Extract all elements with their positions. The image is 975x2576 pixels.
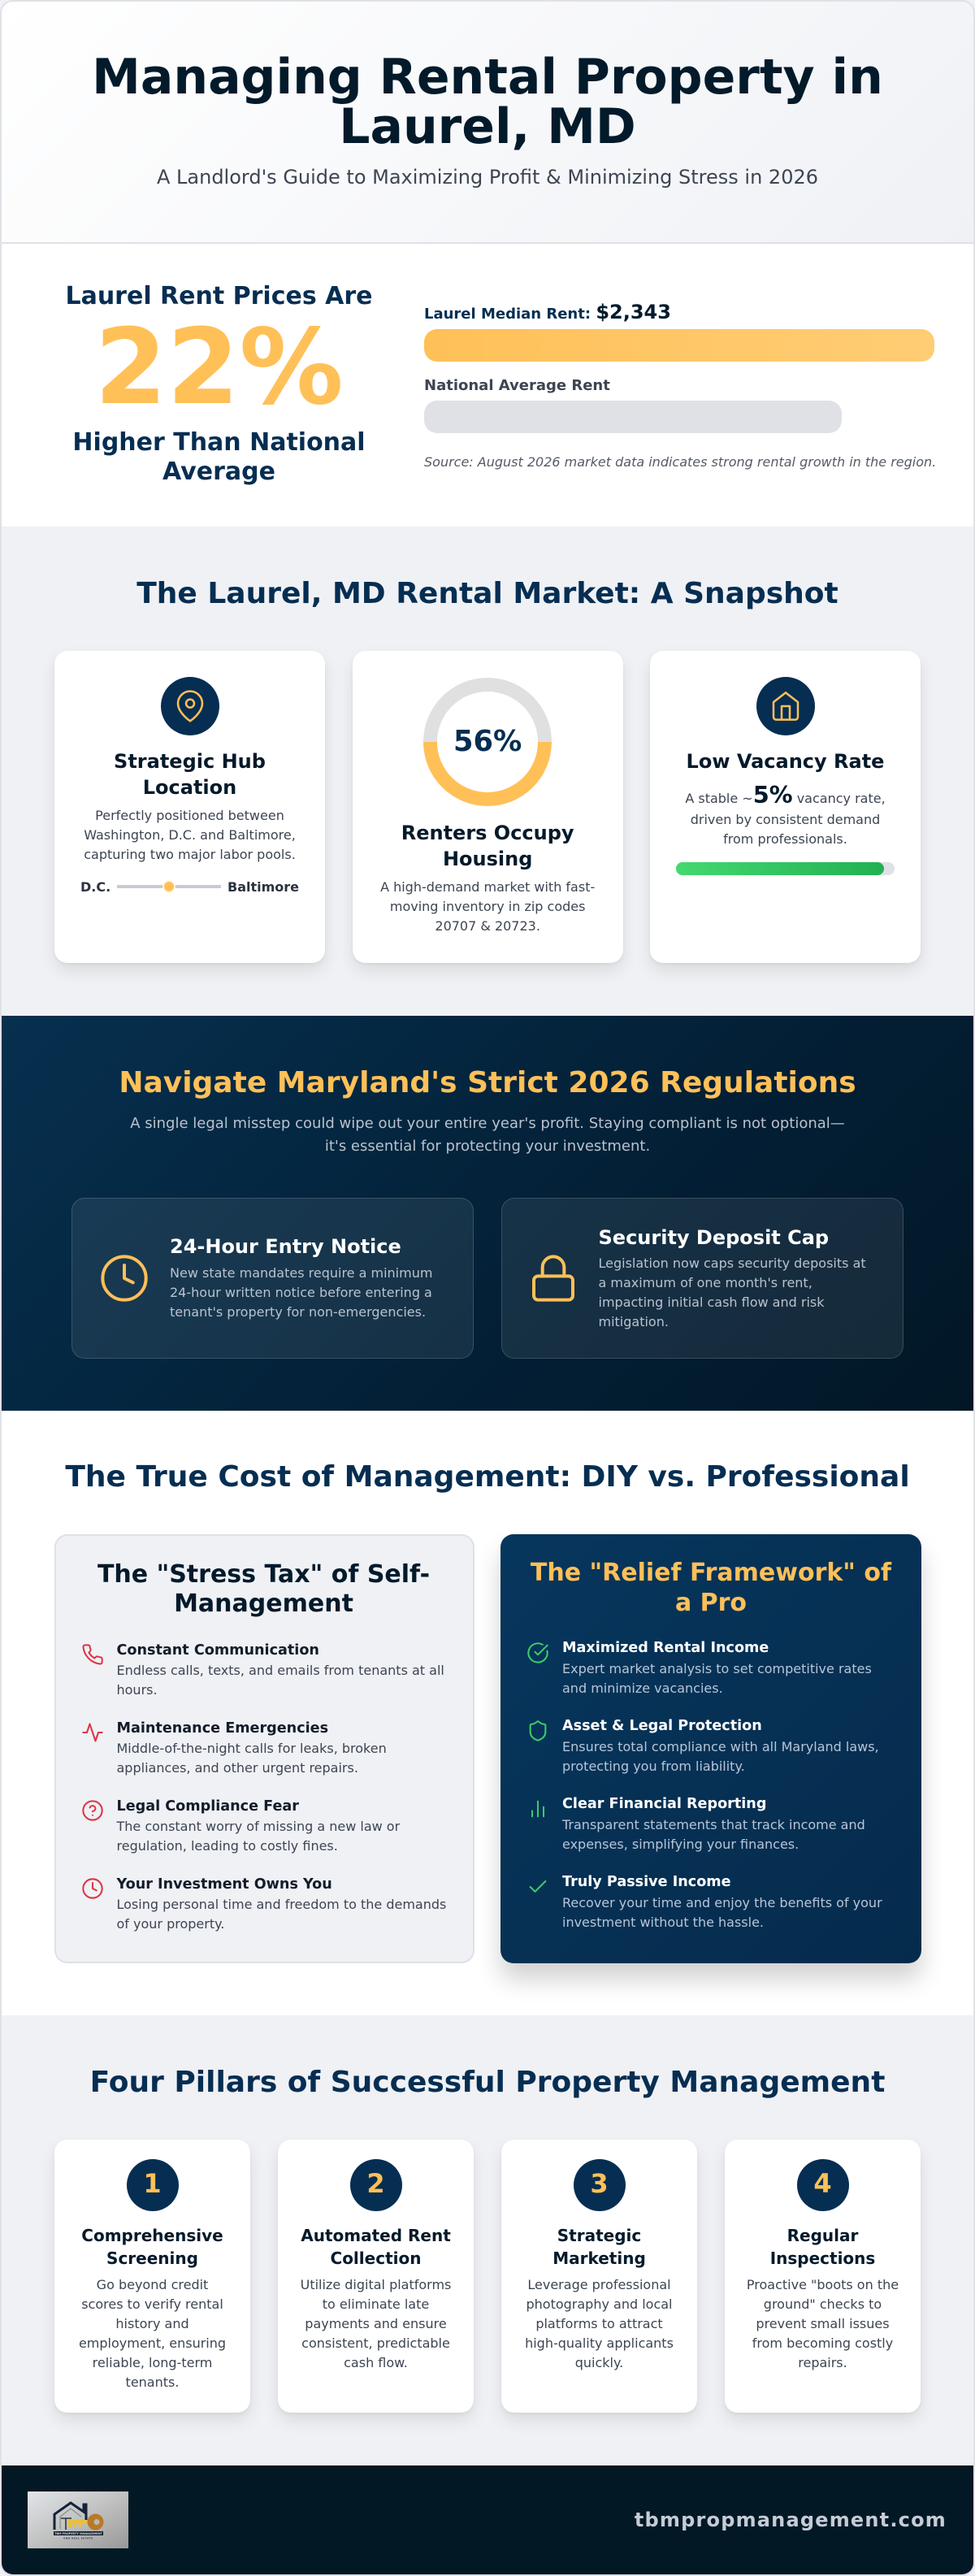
item: maximized rental income: and minimize vacancies. (562, 1680, 723, 1696)
icon: clock (101, 1255, 148, 1302)
heading: rent prices lead-in: Laurel Rent Prices Are (65, 282, 373, 310)
card heading (401, 822, 574, 870)
item: truly passive income: Truly Passive Income (562, 1874, 731, 1890)
progress bar: occupancy (676, 862, 895, 875)
card heading: Automated Rent (301, 2226, 451, 2245)
intro text: it's essential for protecting your investment. (325, 1138, 650, 1155)
item: maintenance emergencies: Maintenance Emergencies (117, 1720, 328, 1737)
card text (79, 2277, 226, 2390)
card heading: Marketing (552, 2249, 646, 2268)
item: clear financial reporting: Transparent statements that track income and (562, 1817, 865, 1832)
card heading (552, 2226, 646, 2268)
card heading: 24-Hour Entry Notice (170, 1235, 401, 1258)
card text (84, 808, 296, 862)
card: strategic hub location (54, 651, 325, 963)
card text (685, 781, 886, 847)
card heading: Low Vacancy Rate (687, 750, 884, 773)
item: clear financial reporting: expenses, simplifying your finances. (562, 1837, 799, 1852)
card heading: Strategic (557, 2226, 641, 2245)
source note: Source: August 2026 market data indicates strong rental growth in the region. (424, 454, 936, 470)
logo (28, 2491, 128, 2548)
icon: house (756, 677, 814, 735)
item: asset and legal protection: Ensures total compliance with all Maryland laws, (562, 1739, 879, 1754)
card: pillar 3 (501, 2140, 697, 2413)
card: low vacancy rate (650, 651, 921, 963)
card heading (81, 2226, 223, 2268)
panel heading (531, 1559, 892, 1617)
heading: higher than national average: Higher Than National (72, 428, 366, 457)
card text: history and (115, 2316, 189, 2331)
logo: TBM PROPERTY MANAGEMENT (54, 2532, 103, 2535)
card text: New state mandates require a minimum (170, 1265, 432, 1281)
heading: higher than national average (72, 428, 366, 486)
item: constant communication: Constant Communication (117, 1642, 319, 1659)
card text: 20707 & 20723. (435, 918, 540, 934)
card text: reliable, long-term (93, 2355, 212, 2370)
item: legal compliance fear: regulation, leading to costly fines. (117, 1838, 338, 1854)
card heading: Comprehensive (81, 2226, 223, 2245)
donut chart: 56 percent: 56% (453, 725, 522, 758)
item: constant communication (82, 1642, 444, 1698)
card heading: Location (143, 776, 236, 799)
card text (525, 2277, 674, 2370)
card text: ground" checks to (764, 2296, 882, 2312)
card text: Leverage professional (527, 2277, 671, 2292)
number badge: 4 (813, 2168, 832, 2199)
number badge: 1 (143, 2168, 162, 2199)
card text (170, 1265, 432, 1320)
heading: higher than national average: Average (162, 458, 275, 486)
card heading: Regular (787, 2226, 858, 2245)
item: your investment owns you: Losing personal time and freedom to the demands (117, 1897, 446, 1912)
card text: Utilize digital platforms (301, 2277, 451, 2292)
panel heading: The "Stress Tax" of Self- (98, 1560, 430, 1589)
panel: header (0, 0, 975, 244)
card text: consistent, predictable (301, 2335, 450, 2351)
card text: photography and local (526, 2296, 673, 2312)
item: asset and legal protection: Asset & Legal Protection (562, 1718, 762, 1734)
card heading: Security Deposit Cap (598, 1226, 829, 1249)
card: pillar 2 (278, 2140, 474, 2413)
location slider: D.C. to Baltimore: Baltimore (228, 879, 299, 895)
card heading: Screening (106, 2249, 198, 2268)
card text: 24-hour written notice before entering a (170, 1285, 432, 1300)
title: Laurel, MD (339, 98, 636, 155)
bar: national average rent (424, 401, 842, 433)
title: Managing Rental Property in (92, 49, 883, 106)
bar: Laurel median rent (424, 329, 934, 362)
card heading: Strategic Hub (114, 750, 266, 773)
card text: payments and ensure (305, 2316, 447, 2331)
item: your investment owns you (82, 1876, 446, 1932)
card text (380, 879, 595, 934)
panel: four pillars (0, 2015, 975, 2465)
intro text: A single legal misstep could wipe out your entire year's profit. Staying compliant is not optional— (130, 1115, 845, 1132)
card text: repairs. (798, 2355, 847, 2370)
card heading: Renters Occupy (401, 822, 574, 844)
heading: true cost: The True Cost of Management: DIY vs. Professional (65, 1460, 910, 1494)
item: your investment owns you: Your Investment Owns You (117, 1876, 332, 1893)
item: legal compliance fear: Legal Compliance Fear (117, 1798, 299, 1815)
item: truly passive income: investment without the hassle. (562, 1915, 764, 1930)
panel: DIY vs professional (0, 1411, 975, 2015)
item: truly passive income: Recover your time and enjoy the benefits of your (562, 1895, 882, 1910)
card text: platforms to attract (535, 2316, 663, 2331)
card heading: Housing (443, 848, 532, 870)
label: Laurel median rent: Laurel Median Rent: $2,343 (424, 301, 671, 323)
card heading: Collection (331, 2249, 421, 2268)
item: maintenance emergencies (82, 1720, 387, 1776)
card text: capturing two major labor pools. (84, 847, 296, 862)
item: maximized rental income: Maximized Rental Income (562, 1640, 769, 1656)
card text: scores to verify rental (81, 2296, 223, 2312)
label: national average rent: National Average Rent (424, 377, 610, 394)
item: asset and legal protection: protecting you from liability. (562, 1759, 745, 1774)
card heading (301, 2226, 451, 2268)
item: legal compliance fear (82, 1798, 400, 1854)
donut chart: 56 percent (423, 678, 552, 806)
card: 24-hour entry notice (72, 1198, 474, 1359)
logo: AND REAL ESTATE (63, 2537, 93, 2540)
item: constant communication: Endless calls, texts, and emails from tenants at all (117, 1663, 444, 1678)
item: maximized rental income: Expert market analysis to set competitive rates (562, 1661, 872, 1676)
panel heading: The "Relief Framework" of (531, 1559, 891, 1587)
panel: Maryland regulations (0, 1016, 975, 1411)
card: pillar 1 (54, 2140, 250, 2413)
number badge (127, 2159, 179, 2211)
card text: cash flow. (344, 2355, 408, 2370)
heading: market snapshot: The Laurel, MD Rental Market: A Snapshot (136, 577, 838, 610)
card text: A high-demand market with fast- (380, 879, 595, 895)
item: asset and legal protection (530, 1718, 879, 1774)
card text (301, 2277, 451, 2370)
card text: to eliminate late (323, 2296, 429, 2312)
card text: tenants. (126, 2374, 179, 2390)
item: clear financial reporting (531, 1796, 865, 1852)
number badge: 3 (590, 2168, 609, 2199)
subtitle: A Landlord's Guide to Maximizing Profit & Minimizing Stress in 2026 (157, 166, 818, 189)
number badge (349, 2159, 401, 2211)
location slider: D.C. to Baltimore: D.C. (80, 879, 110, 895)
card text (598, 1255, 866, 1329)
icon: lock (532, 1255, 574, 1302)
card text: mitigation. (598, 1314, 669, 1329)
card: security deposit cap (500, 1198, 904, 1359)
panel heading: Management (174, 1589, 353, 1618)
item: your investment owns you: of your property. (117, 1916, 224, 1932)
item: maximized rental income (527, 1640, 872, 1696)
icon: map pin (161, 677, 219, 735)
panel: stress tax (54, 1534, 474, 1963)
panel heading: a Pro (675, 1589, 747, 1617)
item: maintenance emergencies: Middle-of-the-night calls for leaks, broken (117, 1741, 387, 1756)
card text: employment, ensuring (79, 2335, 226, 2351)
item: truly passive income (530, 1874, 882, 1930)
card: renters occupy housing (353, 651, 623, 963)
card text: Perfectly positioned between (95, 808, 284, 823)
number badge: 2 (366, 2168, 385, 2199)
card text: high-quality applicants (525, 2335, 674, 2351)
website: tbmpropmanagement.com (635, 2509, 947, 2531)
heading: regulations: Navigate Maryland's Strict 2026 Regulations (119, 1066, 856, 1099)
card text: quickly. (575, 2355, 623, 2370)
card text: Proactive "boots on the (747, 2277, 899, 2292)
card: pillar 4 (725, 2140, 921, 2413)
card text: prevent small issues (756, 2316, 890, 2331)
item: maintenance emergencies: appliances, and other urgent repairs. (117, 1760, 358, 1776)
panel heading (98, 1560, 430, 1618)
item: clear financial reporting: Clear Financial Reporting (562, 1796, 766, 1812)
card text: from professionals. (723, 830, 847, 847)
big stat: 22 percent: 22% (94, 307, 344, 428)
item: legal compliance fear: The constant worry of missing a new law or (117, 1819, 400, 1834)
intro text (130, 1115, 845, 1155)
card text: moving inventory in zip codes (390, 899, 585, 914)
number badge (574, 2159, 626, 2211)
number badge (796, 2159, 848, 2211)
card text: tenant's property for non-emergencies. (170, 1304, 426, 1320)
card text (747, 2277, 899, 2370)
card heading (114, 750, 266, 799)
location slider: D.C. to Baltimore (80, 879, 299, 895)
card heading: Inspections (770, 2249, 875, 2268)
panel: footer (0, 2465, 975, 2576)
card text: Legislation now caps security deposits at (598, 1255, 866, 1271)
card text: Washington, D.C. and Baltimore, (84, 827, 296, 843)
card text: driven by consistent demand (691, 811, 880, 827)
heading: four pillars: Four Pillars of Successful Property Management (90, 2066, 885, 2098)
panel: rent comparison (0, 244, 975, 527)
card text: a maximum of one month's rent, (598, 1275, 812, 1290)
card text: impacting initial cash flow and risk (598, 1295, 824, 1310)
card text: A stable ~5% vacancy rate, (685, 781, 886, 809)
item: constant communication: hours. (117, 1682, 158, 1698)
panel: relief framework (500, 1534, 921, 1963)
card text: from becoming costly (752, 2335, 893, 2351)
card text: Go beyond credit (97, 2277, 208, 2292)
panel: market snapshot (0, 527, 975, 1016)
card heading (770, 2226, 875, 2268)
title (92, 49, 883, 155)
